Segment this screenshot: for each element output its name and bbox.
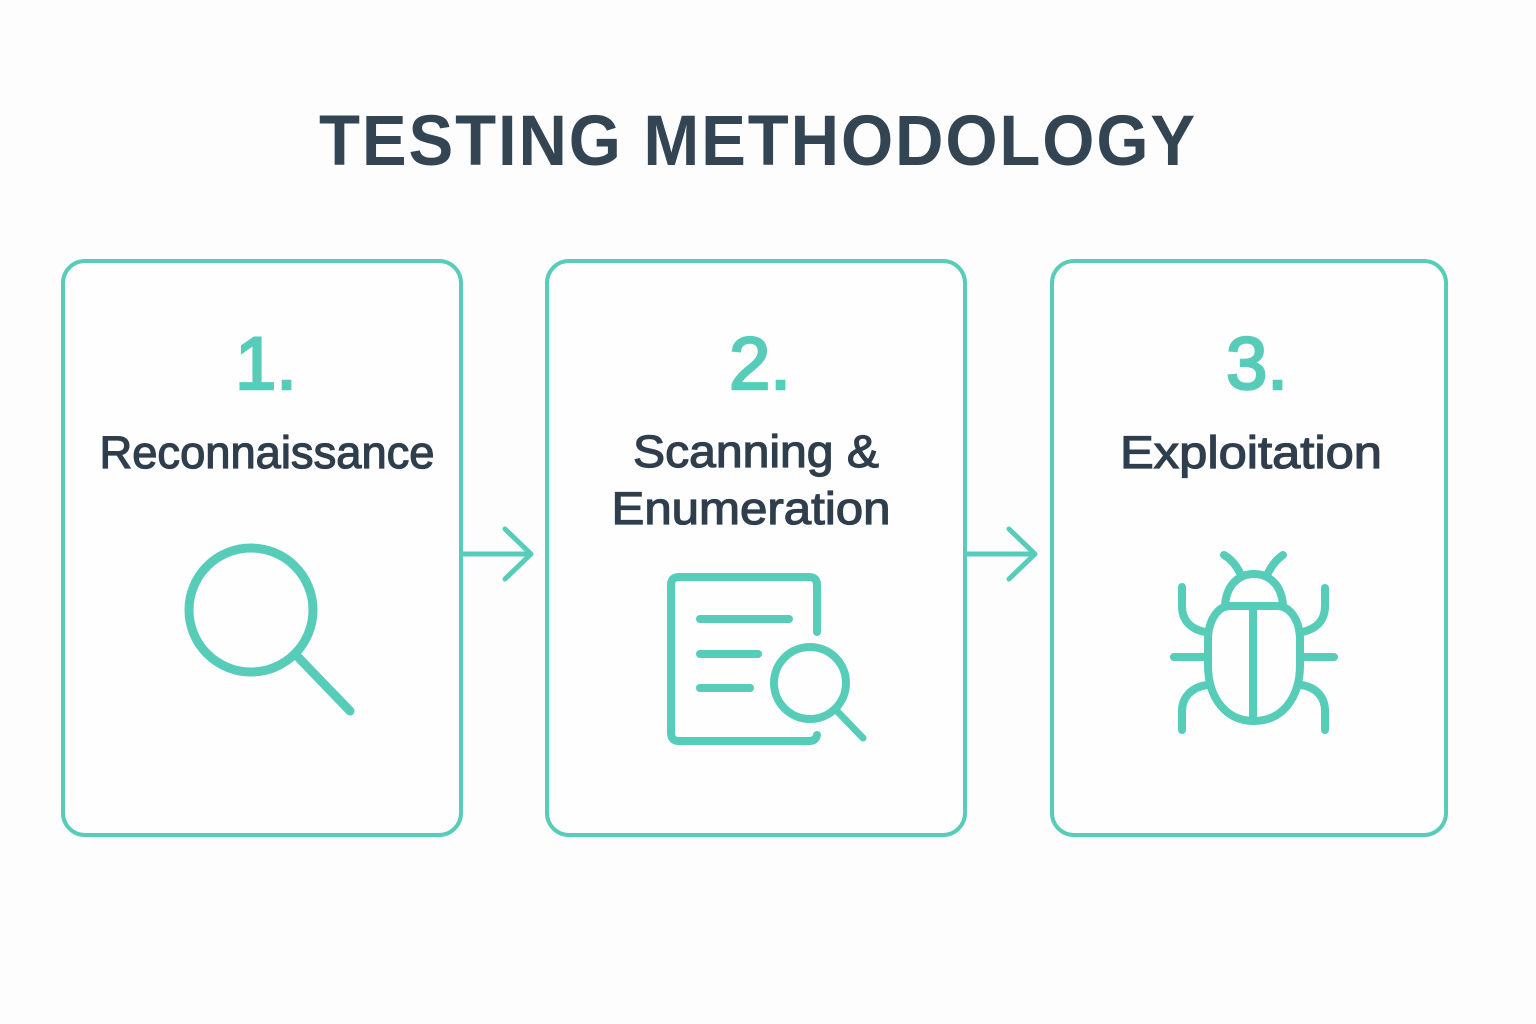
title: TESTING METHODOLOGY bbox=[319, 102, 1197, 181]
step number 3: 3. bbox=[1226, 322, 1288, 405]
panel: exploitation bbox=[1052, 261, 1446, 835]
heading: exploitation: Exploitation bbox=[1120, 427, 1382, 478]
panel: reconnaissance bbox=[63, 261, 461, 835]
icon: magnifying glass bbox=[189, 548, 350, 711]
arrow: step 1 to step 2 bbox=[462, 529, 531, 579]
heading: reconnaissance: Reconnaissance bbox=[100, 427, 435, 478]
step number 1: 1. bbox=[235, 322, 297, 405]
arrow: step 2 to step 3 bbox=[966, 529, 1035, 579]
heading: scanning and enumeration: Scanning & bbox=[633, 426, 879, 477]
icon: document with magnifier bbox=[671, 577, 863, 741]
heading: scanning and enumeration: Enumeration bbox=[612, 483, 890, 534]
step number 2: 2. bbox=[729, 322, 791, 405]
heading: scanning and enumeration bbox=[612, 426, 890, 534]
panel: scanning and enumeration bbox=[547, 261, 965, 835]
icon: bug bbox=[1174, 555, 1334, 730]
